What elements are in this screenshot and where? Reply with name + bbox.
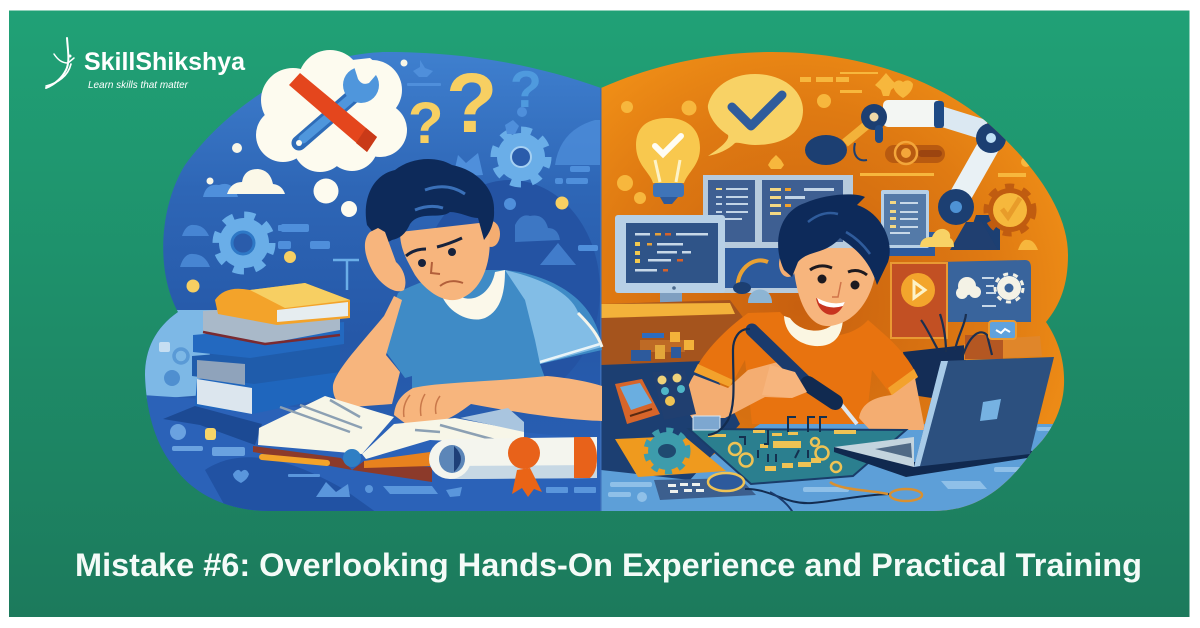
hair	[366, 159, 494, 245]
nose and frown	[431, 262, 463, 286]
gripping fingers	[762, 365, 807, 398]
icon: question marks: ?	[408, 91, 443, 156]
toggle	[885, 142, 945, 164]
collar	[440, 270, 505, 320]
hand on head	[365, 228, 405, 291]
title: Mistake #6: Overlooking Hands-On Experience and Practical Training	[75, 547, 1142, 583]
book 4	[192, 354, 337, 384]
small device and hook	[733, 260, 772, 303]
book stack	[192, 283, 350, 414]
lower light-blue lobe	[140, 310, 215, 400]
laptop	[834, 357, 1054, 477]
icon: white cloud	[227, 169, 285, 194]
gear plate	[615, 430, 726, 477]
icon: question marks: ?	[446, 56, 497, 150]
icon: badge gear	[986, 186, 1034, 234]
icon: red cross bar	[289, 73, 377, 152]
pencil holder and wires	[903, 314, 1042, 400]
logo tagline: Learn skills that matter	[88, 79, 188, 91]
shirt	[386, 270, 602, 390]
icon: question marks: ?	[510, 61, 542, 119]
arms	[685, 360, 925, 430]
book 5	[195, 372, 337, 414]
sleeve cuffs	[694, 364, 918, 396]
desk surface	[601, 424, 1070, 515]
collar	[784, 316, 843, 346]
orange shelf	[601, 300, 745, 365]
thought trail	[314, 178, 357, 217]
decorative clouds and shapes	[180, 60, 605, 267]
open book	[253, 396, 524, 482]
background monitors	[703, 175, 853, 293]
ear	[482, 221, 500, 247]
background shading	[436, 180, 600, 378]
book shadow	[163, 406, 262, 445]
desk details	[608, 427, 1052, 502]
icon: question marks	[410, 70, 539, 143]
icon: gear left	[217, 216, 271, 270]
circuit board	[689, 416, 906, 484]
ribbon	[512, 468, 542, 497]
figure: studying boy	[333, 159, 602, 425]
small code tablet	[879, 190, 954, 256]
book 2	[203, 310, 340, 343]
decorative shapes	[617, 72, 1038, 250]
cables	[745, 482, 922, 515]
lobe and desk details	[159, 342, 596, 497]
logo	[46, 38, 246, 91]
book 3	[193, 322, 344, 358]
panel: practice side (orange)	[601, 50, 1071, 515]
center divider	[600, 88, 602, 511]
phone and buttons	[615, 370, 696, 424]
icon: leaping figure	[46, 38, 74, 88]
robot arm	[805, 100, 1006, 250]
shirt	[694, 312, 918, 424]
icon: gear top right	[495, 131, 547, 183]
icon: wrench	[296, 58, 382, 146]
thought cloud	[256, 50, 407, 172]
icon: speech bubble check	[708, 74, 803, 156]
control strip	[654, 473, 756, 500]
icon: sparkles	[186, 60, 568, 292]
left monitor	[615, 215, 725, 302]
desk surface	[146, 395, 404, 511]
propping arm	[333, 296, 402, 407]
head: practising boy	[778, 194, 890, 326]
soldering iron	[708, 329, 857, 435]
icon: lightbulb	[636, 118, 700, 204]
thought bubble	[256, 50, 407, 217]
panel: theory side (blue)	[140, 50, 605, 515]
eyes and brows	[406, 238, 462, 267]
resting arm	[394, 376, 602, 425]
yellow book	[215, 283, 350, 325]
right panels	[891, 260, 1031, 338]
pencil	[262, 457, 327, 463]
diploma scroll	[429, 437, 597, 497]
logo wordmark: SkillShikshya	[84, 48, 246, 76]
face	[400, 222, 490, 300]
